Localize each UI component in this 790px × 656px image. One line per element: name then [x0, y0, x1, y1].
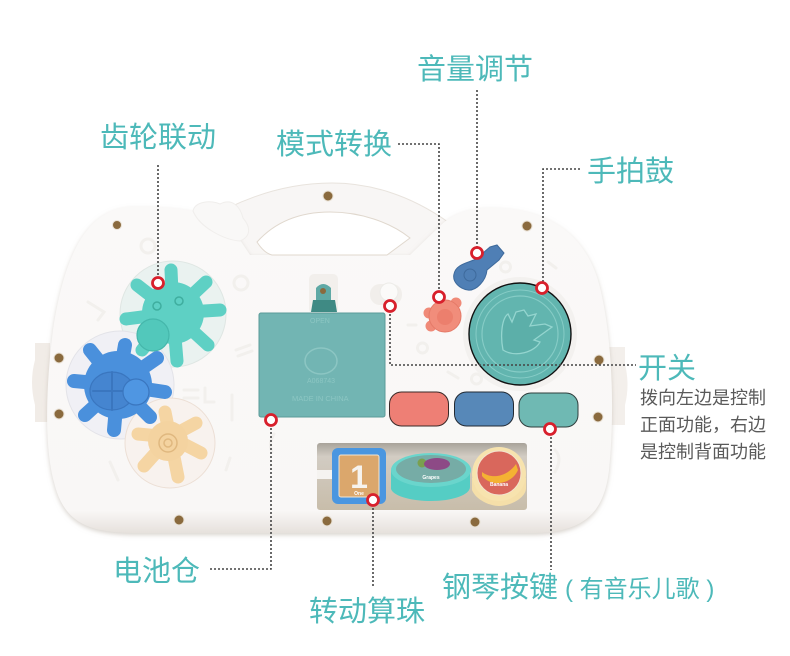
- leader: abacus: [372, 500, 374, 586]
- beige gear: [138, 412, 201, 477]
- grape disc: [391, 453, 471, 501]
- handle opening: [257, 212, 410, 255]
- teal gear: [126, 270, 220, 361]
- leader: power switch: [390, 306, 636, 365]
- description: power switch: [640, 388, 766, 462]
- marker dots: [152, 248, 556, 506]
- battery cover: A068743: [307, 378, 335, 385]
- side knob left: [32, 343, 50, 422]
- label: piano keys: 钢琴按键: [442, 571, 558, 604]
- piano keys: [390, 392, 578, 427]
- mode knob: [424, 298, 462, 332]
- guitar volume slider: [454, 245, 504, 290]
- number block: [332, 448, 386, 504]
- banana disc: [472, 447, 526, 506]
- description: power switch: 正面功能，右边: [640, 411, 766, 437]
- leader: piano keys: [550, 429, 552, 570]
- heart on handle: [193, 202, 249, 241]
- label: mode switch: 模式转换: [276, 128, 392, 161]
- grape disc: Grapes: [422, 475, 440, 481]
- label: gear linkage: 齿轮联动: [100, 121, 216, 154]
- side knob right: [607, 347, 628, 425]
- description: power switch: 拨向左边是控制: [640, 388, 766, 408]
- leader: volume: [476, 90, 478, 253]
- label: power switch: 开关: [638, 352, 696, 385]
- screw holes: [54, 191, 604, 527]
- label: piano keys note: ( 有音乐儿歌 ): [565, 576, 714, 603]
- leader: gear linkage: [157, 165, 159, 283]
- abacus window: [317, 443, 527, 510]
- label: battery: 电池仓: [113, 555, 200, 588]
- label: abacus: 转动算珠: [309, 595, 425, 628]
- shell: [47, 207, 612, 533]
- banana disc: Banana: [490, 482, 508, 488]
- power switch: [370, 283, 402, 305]
- number block: 1: [350, 459, 368, 495]
- leader: hand drum: [543, 169, 580, 288]
- description: power switch: 是控制背面功能: [640, 442, 766, 462]
- label: hand drum: 手拍鼓: [587, 155, 674, 188]
- battery cover: MADE IN CHINA: [292, 394, 349, 403]
- leader: mode switch: [398, 144, 439, 297]
- hand drum: [463, 277, 577, 391]
- embossed notes: [88, 239, 559, 480]
- abacus rod: [317, 470, 337, 479]
- leader: battery: [208, 420, 271, 569]
- label: volume: 音量调节: [417, 53, 533, 86]
- blue gear: [74, 345, 165, 430]
- toy body: [32, 183, 628, 533]
- battery cover: OPEN: [310, 318, 330, 325]
- battery cover: [259, 274, 385, 417]
- carrying handle: [228, 183, 448, 262]
- gear discs: [66, 261, 226, 488]
- number block: One: [354, 491, 364, 497]
